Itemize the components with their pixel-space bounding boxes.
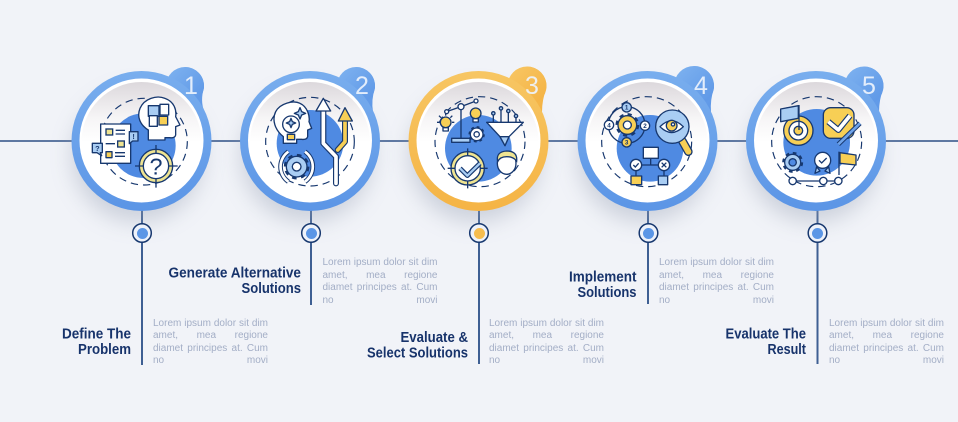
step 1 node (133, 224, 151, 242)
step 3 vertical connector (478, 205, 480, 364)
step 4 number: 4 (694, 72, 708, 100)
step 5 number: 5 (862, 72, 876, 100)
step 5 number badge (848, 66, 884, 112)
heading: Generate Alternative Solutions (168, 266, 301, 297)
step 2 vertical connector (310, 205, 312, 305)
text block: step 4 description: no movi (659, 295, 774, 306)
text block: step 3 description: amet, mea regione (489, 330, 604, 341)
step 4 circle (578, 66, 718, 242)
text block: step 3 description: diamet principes at. Cum (489, 343, 604, 354)
icon: problem definition (92, 97, 187, 188)
step 1 circle (72, 67, 212, 242)
text block: step 2 description: no movi (322, 295, 438, 306)
icon: implement solutions: 2 (643, 123, 647, 130)
step 3 number: 3 (525, 72, 539, 100)
step 2 circle (240, 67, 380, 242)
icon: implement solutions: 3 (625, 140, 629, 147)
heading: Define The Problem (62, 326, 131, 358)
text block: step 1 description: no movi (153, 355, 268, 366)
text block: step 2 description (322, 257, 438, 306)
step 3 ring (408, 71, 548, 211)
text block: step 3 description: Lorem ipsum dolor sit dim (489, 318, 604, 329)
heading: Generate Alternative Solutions: Generate Alternative (168, 266, 301, 282)
text block: step 1 description (153, 318, 268, 366)
step 3 circle (408, 66, 548, 242)
heading: Evaluate and Select Solutions: Evaluate & (400, 330, 468, 346)
text block: step 5 description: diamet principes at. Cum (829, 343, 944, 354)
step 2 number: 2 (355, 72, 369, 100)
heading: Define The Problem: Define The (62, 326, 131, 342)
step 4 number badge (678, 66, 714, 112)
text block: step 2 description: diamet principes at. Cum (322, 282, 438, 293)
icon: alternative solutions (266, 97, 354, 186)
heading: Define The Problem: Problem (78, 342, 131, 358)
text block: step 4 description (659, 257, 774, 306)
heading: Generate Alternative Solutions: Solutions (242, 281, 301, 297)
step 2 node (302, 224, 320, 242)
step 4 vertical connector (647, 205, 649, 304)
text block: step 2 description: amet, mea regione (322, 270, 438, 281)
text block: step 4 description: Lorem ipsum dolor sit dim (659, 257, 774, 268)
step 5 vertical connector (816, 205, 818, 364)
icon: implement solutions: 4 (607, 122, 611, 129)
icon: problem definition: ? (95, 144, 100, 153)
text block: step 5 description: amet, mea regione (829, 330, 944, 341)
heading: Implement Solutions: Implement (569, 270, 637, 286)
step 4 ring (578, 71, 718, 211)
text block: step 5 description (829, 318, 944, 366)
step 1 number badge (170, 67, 204, 112)
text block: step 3 description (489, 318, 604, 366)
text block: step 1 description: diamet principes at. Cum (153, 343, 268, 354)
text block: step 4 description: diamet principes at. Cum (659, 282, 774, 293)
horizontal timeline line (0, 140, 958, 142)
step 1 number: 1 (184, 72, 198, 100)
step 2 ring (240, 71, 380, 211)
icon: evaluate the result (772, 97, 862, 187)
icon: evaluate and select (435, 97, 525, 188)
icon: implement solutions (602, 97, 692, 187)
step 3 number badge (510, 66, 547, 112)
text block: step 3 description: no movi (489, 355, 604, 366)
step 3 node (470, 224, 488, 242)
heading: Evaluate The Result: Evaluate The (726, 326, 806, 342)
step 1 ring (72, 71, 212, 211)
text block: step 4 description: amet, mea regione (659, 270, 774, 281)
step 2 number badge (341, 67, 375, 112)
icon: implement solutions: 1 (625, 105, 629, 112)
heading: Evaluate The Result (726, 326, 806, 358)
text block: step 1 description: Lorem ipsum dolor sit dim (153, 318, 268, 329)
heading: Implement Solutions (569, 270, 637, 301)
step 1 vertical connector (141, 205, 143, 365)
text block: step 5 description: Lorem ipsum dolor sit dim (829, 318, 944, 329)
heading: Evaluate The Result: Result (768, 342, 806, 358)
heading: Evaluate and Select Solutions: Select Solutions (367, 346, 468, 362)
icon: problem definition: ! (132, 132, 135, 141)
text block: step 1 description: amet, mea regione (153, 330, 268, 341)
step 5 circle (746, 66, 886, 242)
step 5 node (808, 224, 827, 242)
heading: Implement Solutions: Solutions (578, 285, 636, 301)
text block: step 5 description: no movi (829, 355, 944, 366)
icon: problem definition: ? (150, 153, 163, 179)
step 4 node (639, 224, 658, 242)
text block: step 2 description: Lorem ipsum dolor sit dim (322, 257, 438, 268)
heading: Evaluate and Select Solutions (367, 330, 468, 362)
step 5 ring (746, 71, 886, 211)
